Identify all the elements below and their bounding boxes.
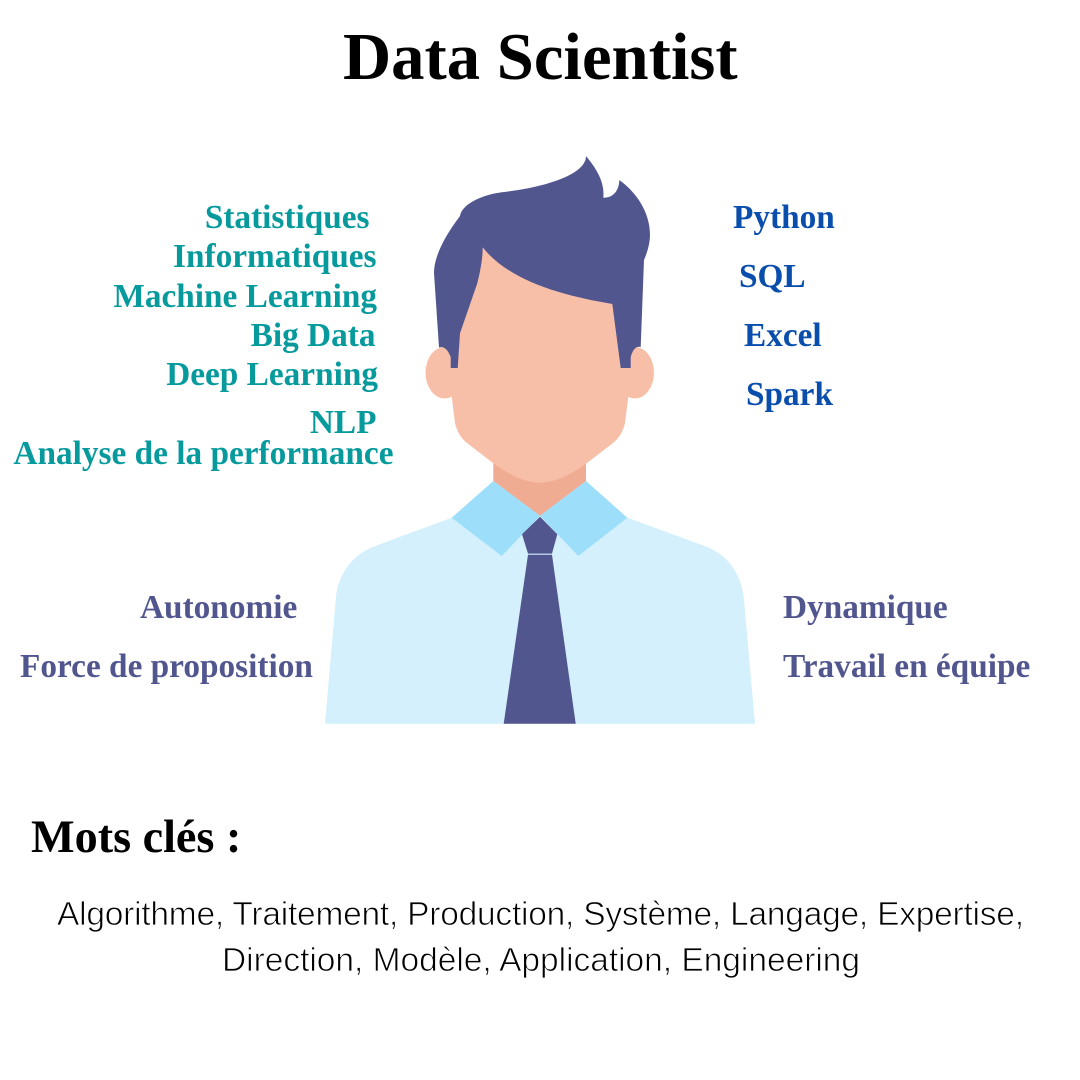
tools list: Excel [744,317,822,354]
tools list: Python [733,199,835,236]
technical skills list: Informatiques [173,238,377,275]
tools list [733,199,835,413]
tools list: Spark [746,376,833,413]
keywords heading: Mots clés : [31,811,241,862]
technical skills list: Big Data [251,317,376,354]
illustration: data scientist bust [325,156,755,724]
tie blade [504,555,576,724]
keywords text [57,896,1024,979]
keywords text: Direction, Modèle, Application, Engineering [222,942,860,979]
technical skills list: Statistiques [205,199,370,236]
right collar [540,481,627,556]
soft skills left: Force de proposition [20,648,313,685]
neck [493,450,586,516]
tie [504,517,576,724]
technical skills list: NLP [310,404,376,441]
tools list: SQL [739,258,806,295]
hair [434,156,650,368]
soft skills right: Dynamique [783,589,948,626]
keywords text: Algorithme, Traitement, Production, Système, Langage, Expertise, [57,896,1024,933]
technical skills list [13,199,394,472]
right ear [616,347,654,398]
left collar [452,481,540,556]
technical skills list: Deep Learning [166,356,378,393]
technical skills list: Analyse de la performance [13,435,394,472]
technical skills list: Machine Learning [113,278,377,315]
soft skills right: Travail en équipe [783,648,1030,685]
soft skills left [20,589,313,685]
title: Data Scientist [343,21,738,94]
soft skills right [783,589,1030,685]
shirt [325,500,755,724]
tie knot [522,517,557,554]
left ear [426,347,464,398]
soft skills left: Autonomie [140,589,297,626]
face [452,230,628,483]
